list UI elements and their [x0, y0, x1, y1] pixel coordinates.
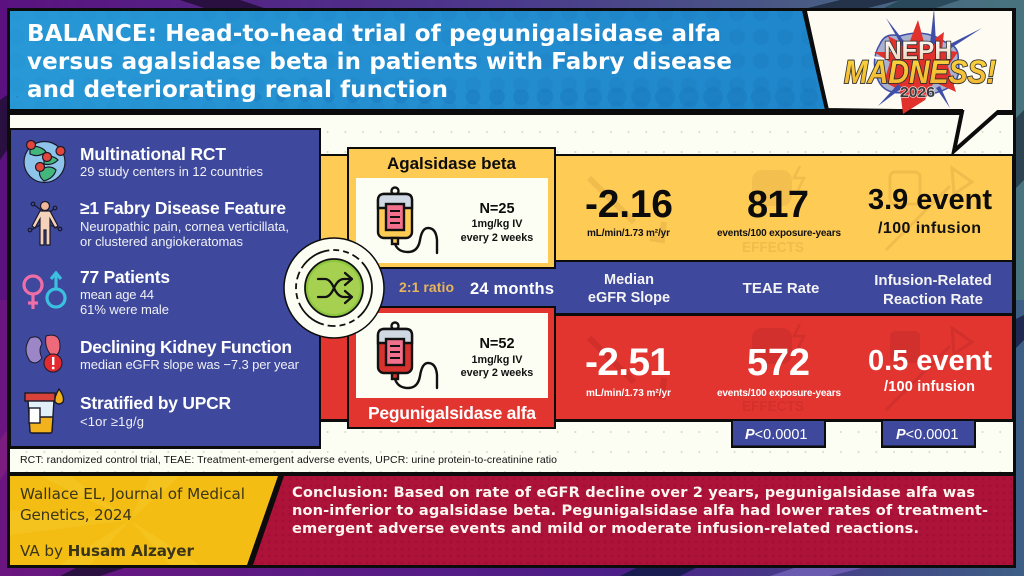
- item: kidney function: [26, 335, 300, 372]
- dose text: every 2 weeks: [461, 367, 533, 379]
- duration: 24 months: [470, 280, 554, 298]
- logo: Neph Madness 2026: 2026: [900, 84, 935, 101]
- results band: agalsidase beta row: [320, 154, 1014, 262]
- conclusion panel: [253, 476, 1013, 565]
- watermark icon: syringe: [886, 328, 972, 410]
- stat: median eGFR slope: mL/min/1.73 m²/yr: [586, 388, 671, 399]
- stat: infusion reaction rate: 0.5 event: [868, 345, 992, 377]
- stat: infusion reaction rate: [868, 345, 992, 395]
- stat: median eGFR slope: -2.51: [585, 341, 671, 384]
- card: pegunigalsidase alfa arm: [347, 306, 556, 429]
- heading: 77 Patients: [80, 267, 170, 287]
- citation text: Genetics, 2024: [20, 506, 132, 524]
- title text: BALANCE: Head-to-head trial of pegunigalsidase alfa: [27, 21, 721, 47]
- heading: Stratified by UPCR: [80, 393, 231, 413]
- watermark icon: side effects: [742, 166, 804, 256]
- stat: infusion reaction rate: /100 infusion: [884, 379, 975, 395]
- logo: Neph Madness 2026: NEPH: [884, 37, 952, 65]
- detail: Neuropathic pain, cornea verticillata,: [80, 219, 289, 234]
- label: infusion-related reaction rate: Infusion-Related: [874, 272, 992, 289]
- p-value: infusion reactions: [881, 420, 976, 448]
- results band: pegunigalsidase alfa row: [320, 316, 1014, 422]
- label: median eGFR slope: Median: [604, 272, 654, 288]
- card: agalsidase beta arm: [347, 147, 556, 269]
- stat: median eGFR slope: -2.16: [585, 183, 673, 226]
- detail: 29 study centers in 12 countries: [80, 164, 264, 179]
- detail: or clustered angiokeratomas: [80, 234, 244, 249]
- dose text: [461, 336, 533, 379]
- label: TEAE rate: TEAE Rate: [743, 280, 819, 297]
- cream content area: [10, 115, 1013, 472]
- icon: IV bag yellow: [378, 188, 437, 253]
- detail: 61% were male: [80, 302, 169, 317]
- arm name: Agalsidase beta: [387, 154, 517, 173]
- dose text: [461, 201, 533, 244]
- title banner: [10, 11, 826, 109]
- heading: Declining Kidney Function: [80, 337, 292, 357]
- stat: infusion reaction rate: [868, 184, 992, 237]
- item: multinational RCT: [24, 140, 264, 182]
- icon: urine cup: [25, 389, 64, 433]
- stat: infusion reaction rate: /100 infusion: [878, 220, 981, 237]
- dose text: N=52: [479, 336, 515, 352]
- detail: median eGFR slope was −7.3 per year: [80, 357, 300, 372]
- logo: Neph Madness 2026: [844, 8, 996, 114]
- logo: Neph Madness 2026: MADNESS!: [844, 54, 996, 90]
- item: Fabry feature: [28, 198, 289, 249]
- arm name: Pegunigalsidase alfa: [368, 403, 536, 423]
- panel: study population: [9, 128, 321, 449]
- icon: kidneys with alert: [26, 335, 62, 372]
- footnote: RCT: randomized control trial, TEAE: Treatment-emergent adverse events, UPCR: urine protein-to-creatinine ratio: [20, 454, 557, 466]
- conclusion text: emergent adverse events and mild or moderate infusion-related reactions.: [292, 520, 919, 537]
- stat: TEAE rate: [717, 342, 841, 399]
- label: infusion-related reaction rate: Reaction Rate: [883, 291, 983, 308]
- stat: TEAE rate: 572: [747, 342, 810, 384]
- icon: globe with pins: [24, 140, 65, 182]
- icon: body with nerve points: [28, 202, 62, 245]
- detail: <1or ≥1g/g: [80, 414, 144, 429]
- watermark icon: declining arrow: [589, 338, 664, 396]
- watermark icon: side effects: EFFECTS: [742, 239, 804, 256]
- title text: and deteriorating renal function: [27, 77, 448, 103]
- outcome labels band: [320, 262, 1014, 316]
- label: median eGFR slope: eGFR Slope: [588, 290, 670, 306]
- stat: TEAE rate: events/100 exposure-years: [717, 388, 841, 399]
- dose text: every 2 weeks: [461, 232, 533, 244]
- heading: ≥1 Fabry Disease Feature: [80, 198, 286, 218]
- dose text: 1mg/kg IV: [471, 218, 523, 230]
- dose text: N=25: [479, 201, 515, 217]
- p-value: TEAE: P<0.0001: [745, 427, 808, 443]
- icon: IV bag red: [378, 322, 437, 388]
- conclusion text: Conclusion: Based on rate of eGFR decline over 2 years, pegunigalsidase alfa was: [292, 484, 975, 501]
- stat: infusion reaction rate: 3.9 event: [868, 184, 992, 216]
- detail: mean age 44: [80, 287, 154, 302]
- stat: median eGFR slope: mL/min/1.73 m²/yr: [587, 228, 670, 239]
- watermark icon: side effects: [742, 324, 804, 415]
- citation text: Wallace EL, Journal of Medical: [20, 485, 245, 503]
- stat: TEAE rate: 817: [747, 184, 809, 226]
- stat: TEAE rate: [717, 184, 841, 239]
- conclusion text: non-inferior to agalsidase beta. Pegunigalsidase alfa had lower rates of treatment-: [292, 502, 988, 519]
- item: patients: [24, 267, 170, 317]
- heading: Multinational RCT: [80, 144, 226, 164]
- citation text: VA by Husam Alzayer: [20, 542, 194, 560]
- icon: gender symbols: [24, 273, 65, 309]
- p-value: TEAE: [731, 420, 826, 448]
- p-value: infusion reactions: P<0.0001: [896, 427, 958, 443]
- randomization ratio: 2:1 ratio: [399, 279, 454, 295]
- watermark icon: syringe: [886, 168, 972, 250]
- speech bubble with logo: [10, 8, 1014, 152]
- item: stratification: [25, 389, 231, 433]
- dose text: 1mg/kg IV: [471, 354, 523, 366]
- watermark icon: declining arrow: [589, 178, 664, 240]
- citation panel: [10, 476, 278, 565]
- watermark icon: side effects: EFFECTS: [742, 398, 804, 415]
- icon: randomization circle: [284, 238, 384, 338]
- stat: TEAE rate: events/100 exposure-years: [717, 228, 841, 239]
- title text: versus agalsidase beta in patients with Fabry disease: [27, 49, 732, 75]
